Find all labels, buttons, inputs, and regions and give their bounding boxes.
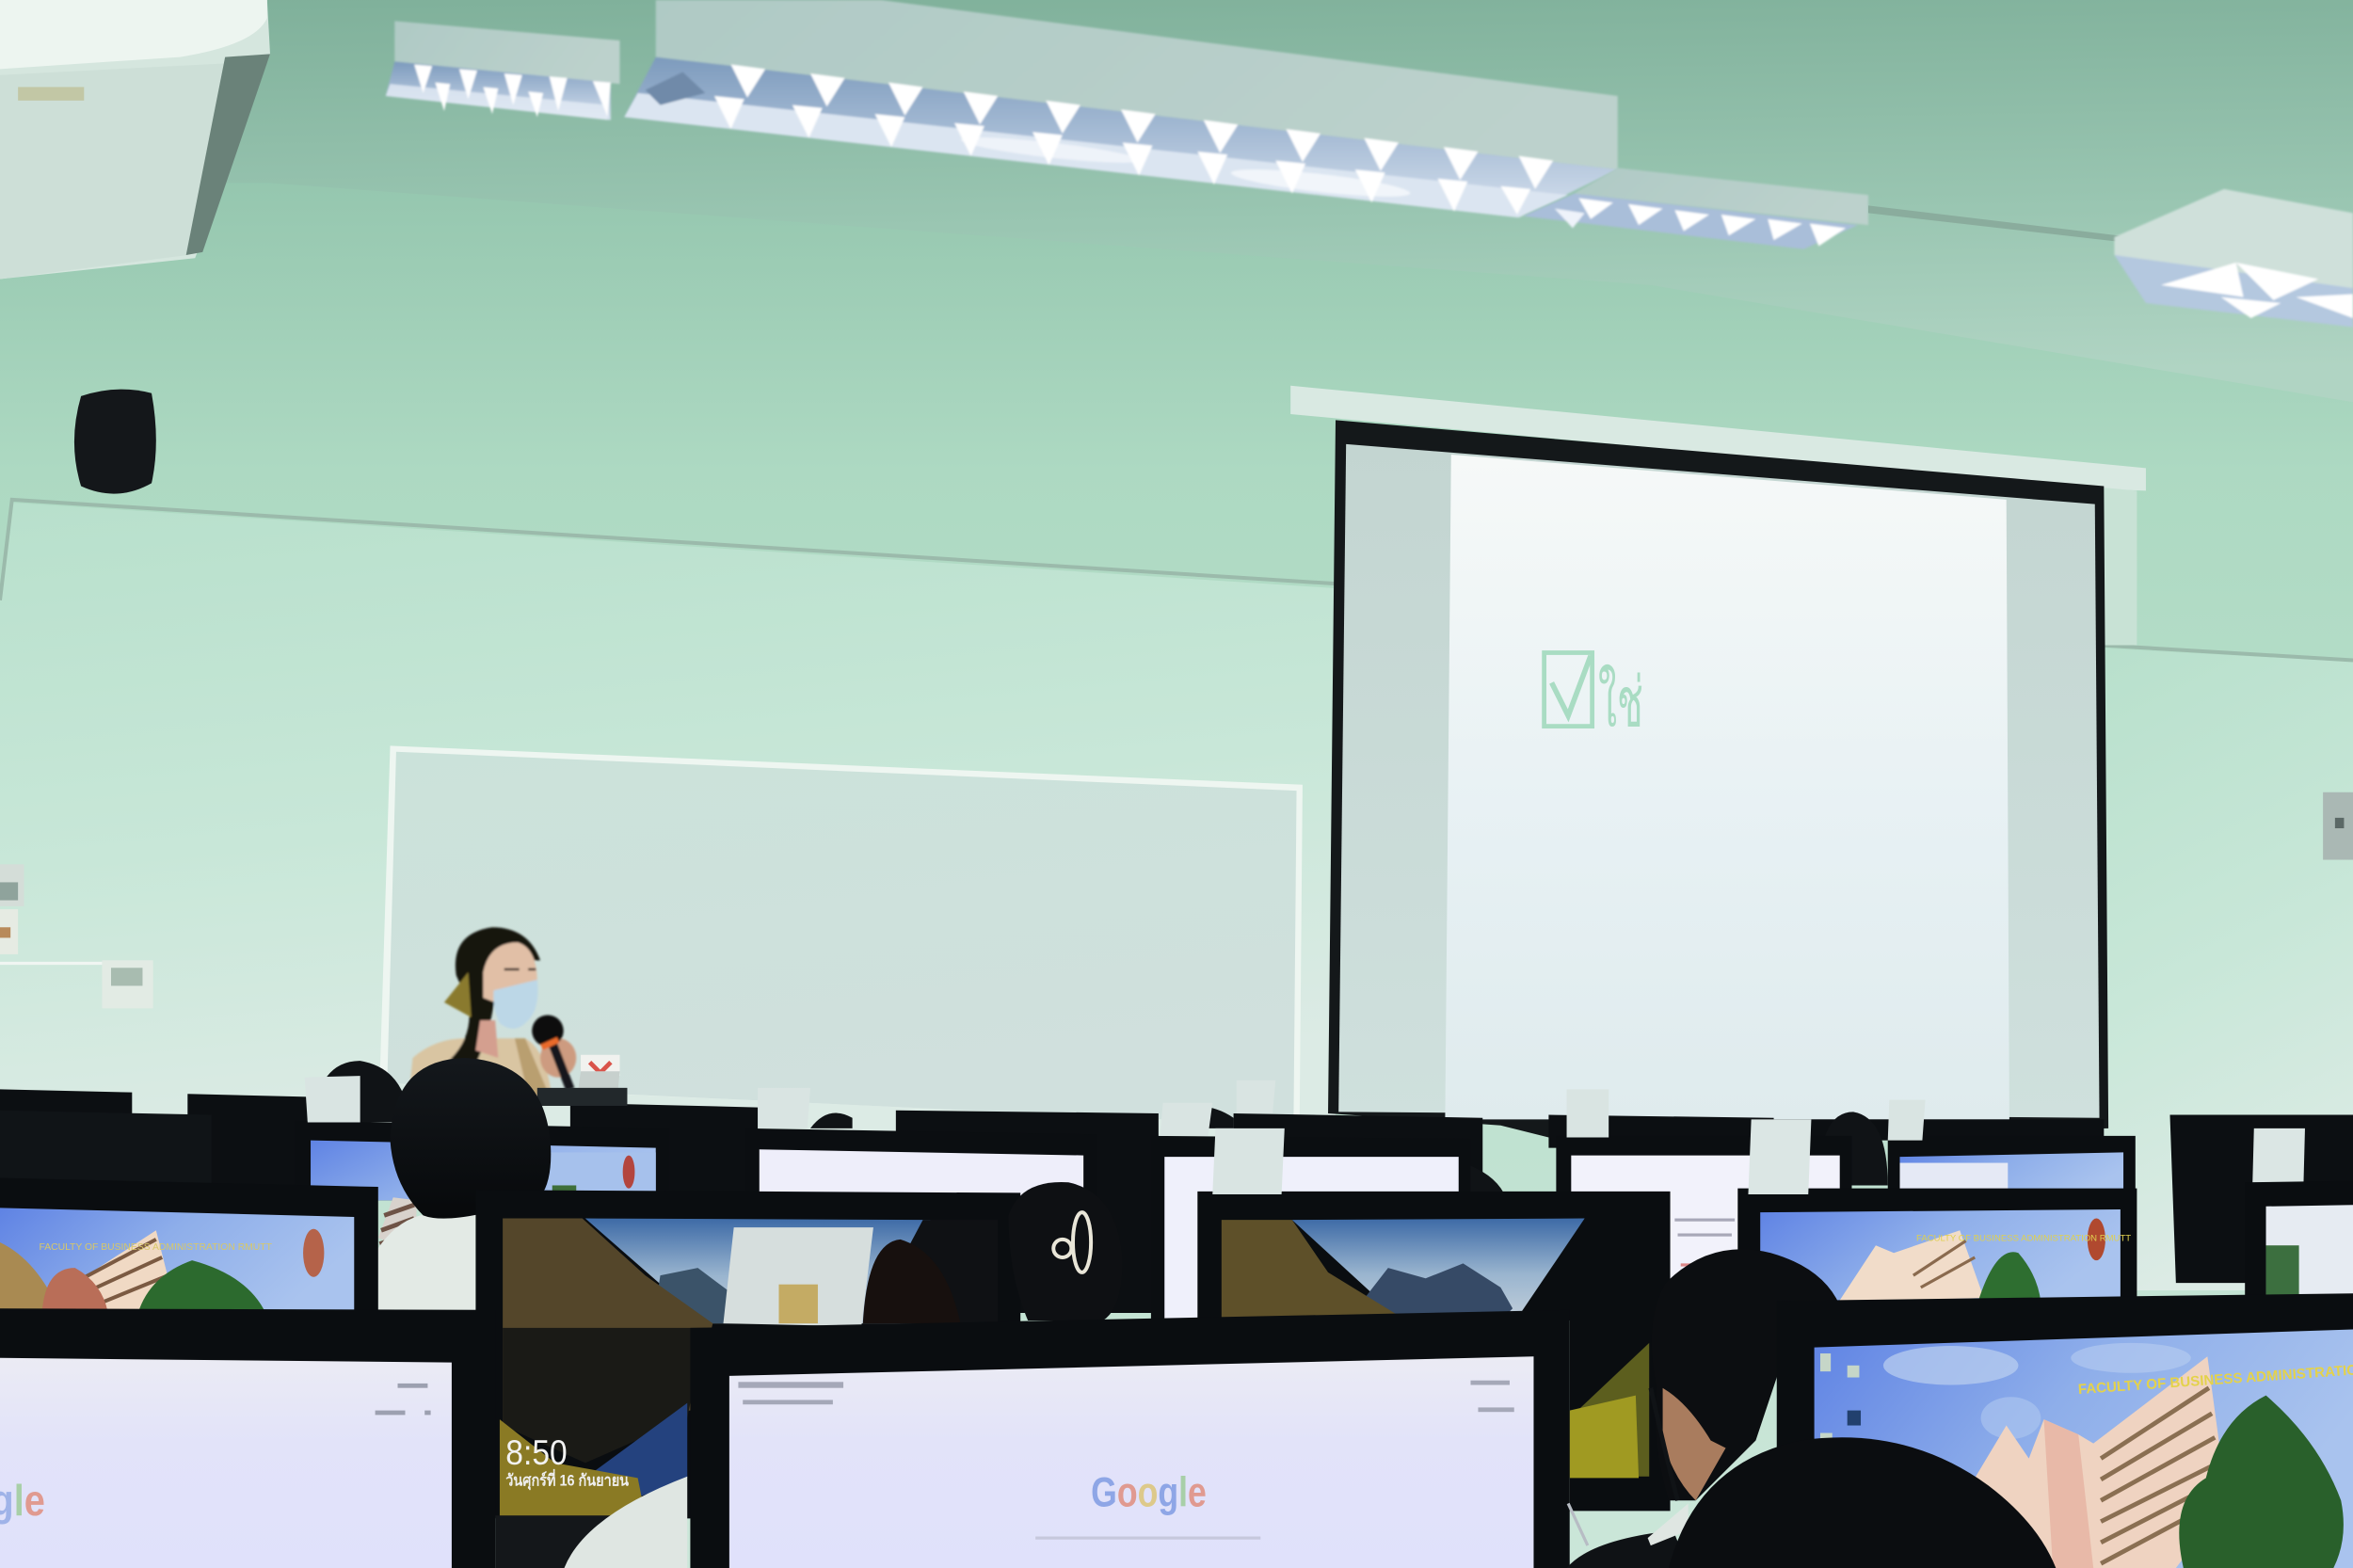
clock: 8:50 <box>505 1433 568 1472</box>
whiteboard <box>379 745 1303 1126</box>
wallpaper monitor, right foreground row <box>1737 1189 2137 1305</box>
brown mountain <box>503 1219 712 1426</box>
Google logo: Google <box>1091 1470 1207 1516</box>
right wall rail <box>2101 646 2353 660</box>
building <box>75 1230 177 1313</box>
slide text: ใช่ <box>1598 664 1643 742</box>
teacher: hair back <box>450 927 540 1068</box>
teacher: hand on microphone <box>540 1038 576 1078</box>
wallpaper monitor, left foreground row <box>0 1177 378 1328</box>
white shirt <box>376 1208 477 1320</box>
student head back left <box>312 1061 409 1123</box>
emblem <box>303 1229 324 1277</box>
screen roller housing <box>1290 386 2146 490</box>
lower wall panel <box>0 503 1336 1141</box>
striped shirt behind <box>378 1197 417 1253</box>
ceiling light: right extension <box>1523 168 1868 249</box>
monitor with browser, centre right <box>1151 1136 1470 1328</box>
teacher: raised hand <box>475 1020 498 1058</box>
monitor stand <box>495 1515 631 1568</box>
lectern monitor edge <box>537 1088 627 1106</box>
wall conduit <box>0 963 102 965</box>
monitor with university wallpaper, right <box>1888 1136 2136 1200</box>
lake <box>585 1403 687 1500</box>
paper card, far right <box>2252 1128 2305 1185</box>
ceiling light: far right fixture <box>2114 189 2353 328</box>
teacher: mask <box>493 980 537 1029</box>
student with glasses and mask <box>1651 1249 1840 1500</box>
slide checkbox <box>1545 653 1593 727</box>
ceiling <box>0 0 2353 402</box>
monitor with browser, right <box>1556 1136 1851 1200</box>
screen black frame <box>1328 420 2108 1137</box>
chair arm <box>1568 1503 1588 1545</box>
paper card, right <box>1748 1119 1811 1194</box>
front centre monitor <box>690 1310 1570 1568</box>
white collar <box>1648 1503 1689 1545</box>
row two monitors <box>0 1111 2136 1328</box>
paper card on landscape monitor <box>723 1227 873 1326</box>
wall speaker <box>74 390 156 494</box>
desktop icons <box>1820 1353 1861 1445</box>
foreground student body <box>1567 1530 1689 1568</box>
browser toolbar icons <box>376 1384 431 1415</box>
name card with red mark <box>576 1055 619 1103</box>
heads in front <box>0 1242 60 1313</box>
ceiling light: small left fixture <box>386 21 619 120</box>
teacher: shirt <box>408 1038 552 1103</box>
monitor with browser, centre <box>745 1128 1096 1200</box>
front right monitor <box>1777 1293 2353 1568</box>
thermostat <box>102 960 153 1008</box>
far row monitors <box>0 1089 2353 1313</box>
clouds <box>1883 1346 2018 1385</box>
yellow foliage <box>1570 1343 1649 1477</box>
wallpaper monitor, right foreground row: FACULTY OF BUSINESS ADMINISTRATION RMUTT <box>1916 1233 2131 1243</box>
teacher: face <box>483 942 537 1008</box>
document lines on browser <box>1674 1219 1735 1267</box>
teacher <box>408 927 576 1103</box>
browser toolbar <box>738 1381 1514 1412</box>
search box hint <box>1035 1537 1260 1540</box>
monitor, far right edge <box>2245 1181 2353 1298</box>
screen surface <box>1338 444 2100 1118</box>
ceiling light: main fixture <box>624 0 1618 217</box>
front left monitor <box>0 1308 495 1568</box>
student heads far row <box>810 1107 1888 1192</box>
teacher: microphone <box>532 1016 570 1089</box>
teacher: scarf knot <box>444 972 472 1017</box>
date: วันศุกร์ที่ 16 กันยายน <box>505 1468 630 1490</box>
teacher: eyes <box>504 968 536 970</box>
white shirt sleeve <box>564 1477 687 1568</box>
teacher: collar <box>515 1038 550 1096</box>
wallpaper landscape monitor, centre <box>1197 1192 1671 1511</box>
right wall panel <box>2101 648 2353 1290</box>
left wall switches <box>0 864 24 954</box>
wall rail <box>0 500 1336 600</box>
tree <box>138 1260 265 1313</box>
sky <box>585 1219 931 1323</box>
paper name cards, far row <box>305 1076 1926 1141</box>
monitor with university wallpaper, left <box>294 1121 669 1200</box>
student head with white shirt <box>376 1058 551 1320</box>
black mountain <box>886 1220 998 1323</box>
faculty title: FACULTY OF BUSINESS ADMINISTRATION RMUTT <box>39 1242 273 1253</box>
short black hair <box>391 1058 551 1219</box>
gold tag on card <box>778 1285 818 1323</box>
projector screen <box>1290 386 2146 1137</box>
projector housing <box>0 0 270 280</box>
tree <box>2179 1396 2344 1568</box>
foreground student head <box>1669 1437 2056 1568</box>
distant mountain <box>653 1268 728 1323</box>
projected slide <box>1445 455 2009 1119</box>
conduit <box>1868 205 2131 243</box>
paper card, centre <box>1212 1128 1285 1194</box>
yellow shrubs <box>500 1419 646 1518</box>
wallpaper landscape monitor, left <box>475 1190 1020 1518</box>
student hair behind card <box>863 1240 960 1323</box>
student with pearl hair clip <box>1008 1182 1123 1320</box>
building <box>1975 1356 2227 1568</box>
right wall box <box>2323 792 2353 860</box>
